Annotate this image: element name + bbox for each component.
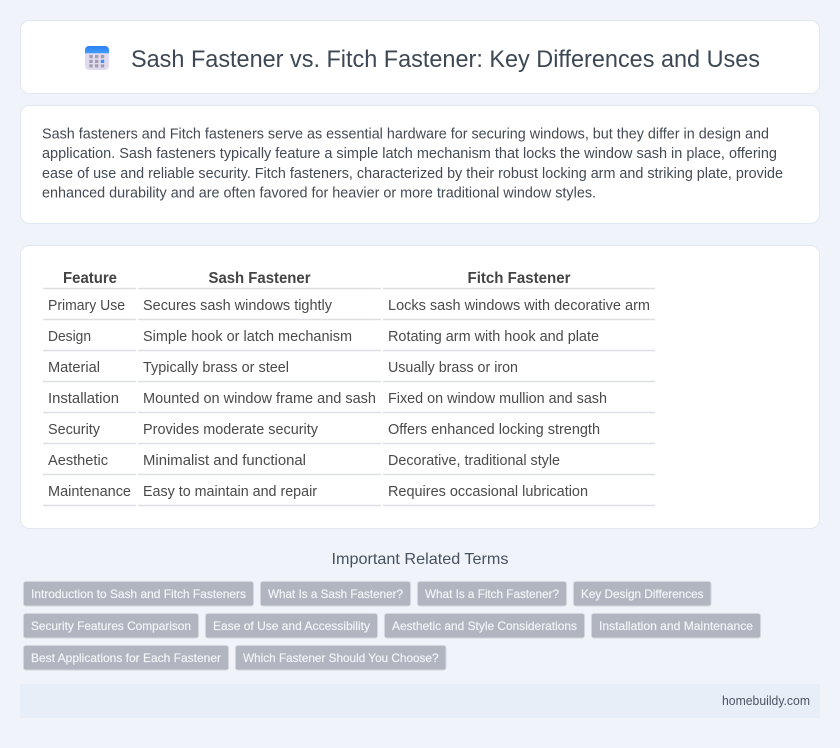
row: primary use	[48, 298, 650, 314]
tag	[24, 614, 198, 638]
intro text: application. Sash fasteners typically feature a simple latch mechanism that locks the window sash in place, offering	[42, 146, 777, 162]
row: aesthetic: Minimalist and functional	[143, 453, 306, 469]
tag	[24, 646, 228, 670]
row: material	[48, 360, 518, 376]
icon: calendar	[85, 46, 109, 70]
row: aesthetic	[48, 453, 560, 469]
intro text: ease of use and reliable security. Fitch fasteners, characterized by their robust locking arm and striking plate, provide	[42, 166, 783, 182]
intro text: enhanced durability and are often favored for heavier or more traditional window styles.	[42, 186, 596, 202]
header panel	[20, 20, 820, 94]
tag: Security Features Comparison	[31, 619, 191, 633]
tag	[592, 614, 760, 638]
tag	[418, 582, 566, 606]
tag	[574, 582, 711, 606]
row: security: Security	[48, 422, 101, 438]
row: primary use: Locks sash windows with decorative arm	[388, 298, 650, 314]
row: design: Design	[48, 329, 91, 345]
tag	[384, 614, 584, 638]
related terms heading: Important Related Terms	[332, 551, 508, 568]
title: Sash Fastener vs. Fitch Fastener: Key Differences and Uses	[131, 46, 760, 73]
row: material: Typically brass or steel	[143, 360, 289, 376]
row: installation: Mounted on window frame and sash	[143, 391, 376, 407]
footer source: homebuildy.com	[722, 694, 810, 708]
footer bar	[20, 684, 820, 718]
row: design	[48, 329, 599, 345]
tag: Installation and Maintenance	[599, 619, 753, 633]
row: material: Material	[48, 360, 100, 376]
tag	[206, 614, 378, 638]
row: material: Usually brass or iron	[388, 360, 518, 376]
tag: Introduction to Sash and Fitch Fasteners	[31, 587, 246, 601]
row: installation: Installation	[48, 391, 119, 407]
row: maintenance: Maintenance	[48, 484, 131, 500]
table header	[63, 270, 570, 287]
comparison table panel	[20, 246, 820, 528]
tag: Key Design Differences	[581, 587, 704, 601]
row: maintenance: Requires occasional lubrication	[388, 484, 588, 500]
tag	[236, 646, 446, 670]
tag: What Is a Fitch Fastener?	[425, 587, 559, 601]
intro text: Sash fasteners and Fitch fasteners serve as essential hardware for securing windows, but they differ in design and	[42, 126, 769, 142]
table header: Fitch Fastener	[468, 270, 570, 287]
tag	[260, 582, 410, 606]
related terms tags	[24, 582, 760, 670]
row: aesthetic: Aesthetic	[48, 453, 108, 469]
row: security	[48, 422, 600, 438]
row: primary use: Secures sash windows tightly	[143, 298, 333, 314]
row: design: Rotating arm with hook and plate	[388, 329, 599, 345]
row: security: Offers enhanced locking strength	[388, 422, 600, 438]
row: maintenance	[48, 484, 588, 500]
row: installation	[48, 391, 607, 407]
tag: Best Applications for Each Fastener	[31, 651, 221, 665]
row: primary use: Primary Use	[48, 298, 125, 314]
row: security: Provides moderate security	[143, 422, 319, 438]
tag: Aesthetic and Style Considerations	[392, 619, 577, 633]
tag: Ease of Use and Accessibility	[213, 619, 370, 633]
intro panel	[20, 106, 820, 224]
tag	[24, 582, 254, 606]
row: aesthetic: Decorative, traditional style	[388, 453, 560, 469]
row: maintenance: Easy to maintain and repair	[143, 484, 317, 500]
table header: Sash Fastener	[208, 270, 310, 287]
row: design: Simple hook or latch mechanism	[143, 329, 352, 345]
table header: Feature	[63, 270, 117, 287]
intro text	[42, 126, 783, 202]
tag: What Is a Sash Fastener?	[268, 587, 403, 601]
row: installation: Fixed on window mullion and sash	[388, 391, 607, 407]
tag: Which Fastener Should You Choose?	[243, 651, 439, 665]
